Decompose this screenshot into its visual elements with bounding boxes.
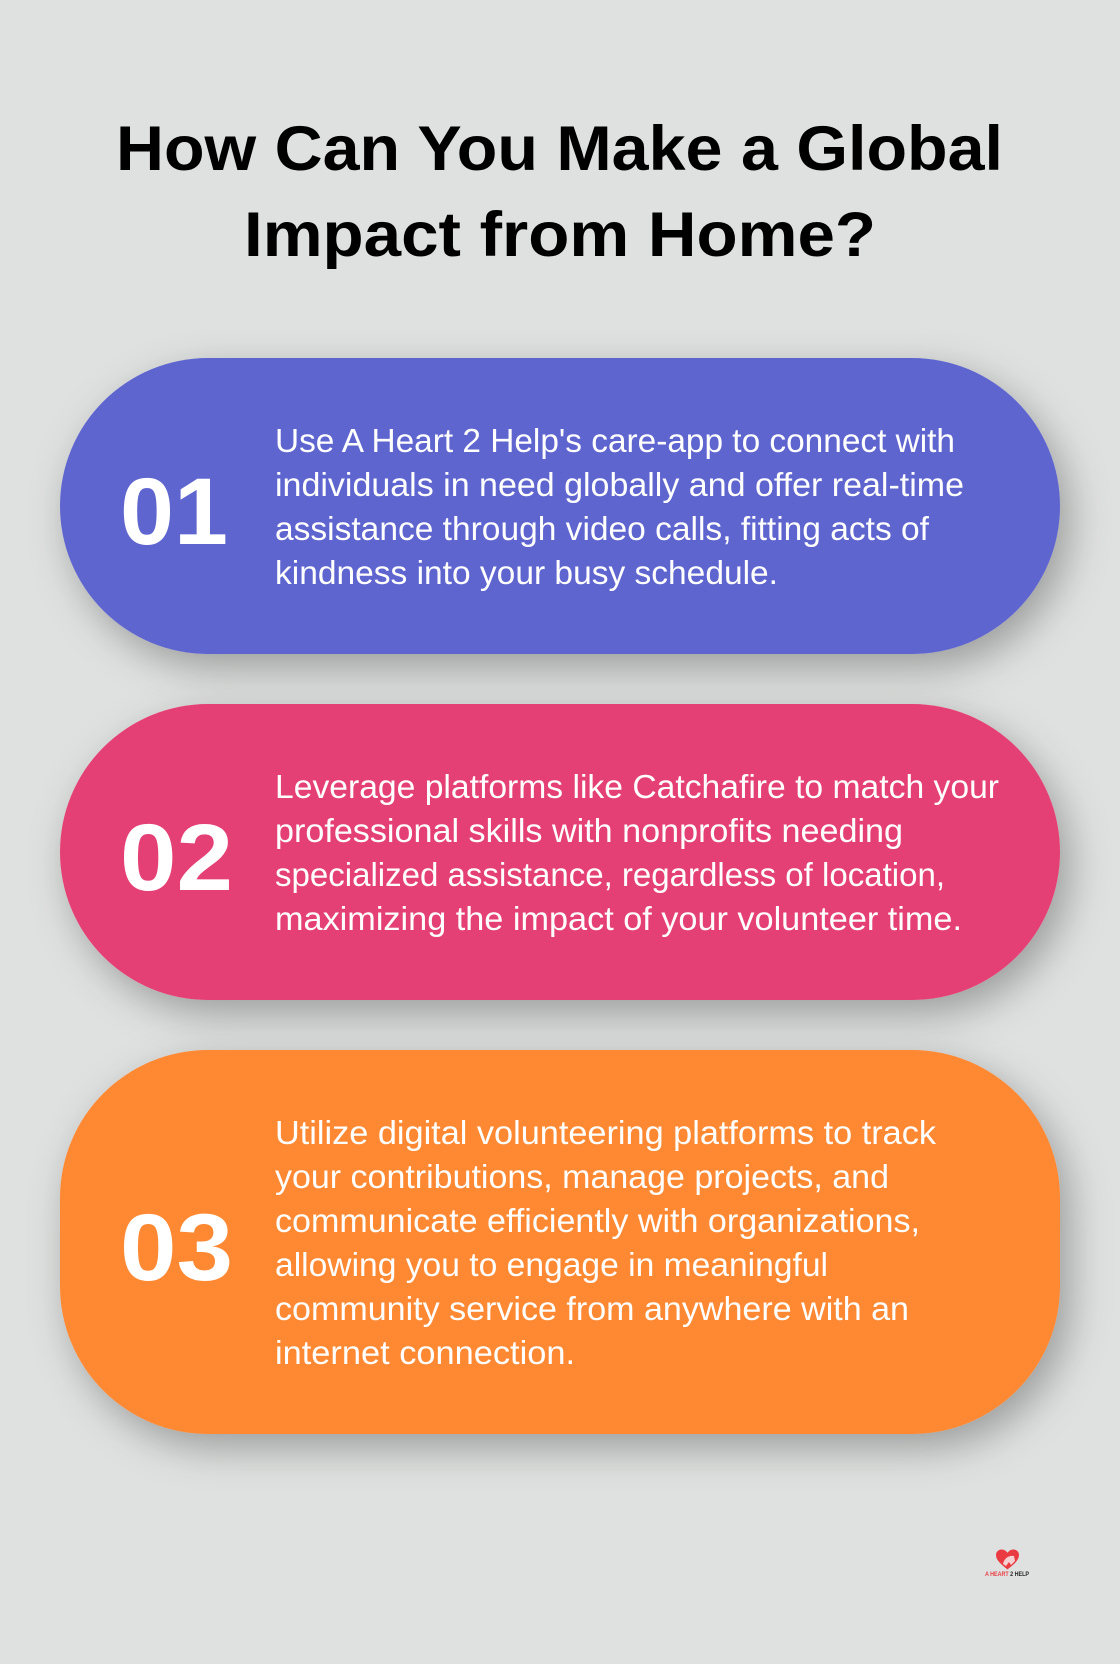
text block: step 02: Leverage platforms like Catchafire to match your: [275, 768, 999, 805]
text block: step 01: Use A Heart 2 Help's care-app to connect with: [275, 422, 955, 459]
title: [116, 114, 1003, 270]
text block: step 03: [275, 1114, 937, 1371]
logo: A Heart 2 Help: [985, 1550, 1030, 1578]
number: 03: 03: [120, 1195, 233, 1301]
text block: step 02: [275, 768, 999, 937]
text block: step 01: assistance through video calls, fitting acts of: [275, 510, 930, 547]
panel: step 02: [60, 704, 1060, 1000]
panel: step 01: [60, 358, 1060, 654]
text block: step 02: maximizing the impact of your volunteer time.: [275, 900, 962, 937]
text block: step 03: your contributions, manage projects, and: [275, 1158, 889, 1195]
title: How Can You Make a Global: [116, 114, 1003, 184]
text block: step 02: professional skills with nonprofits needing: [275, 812, 903, 849]
text block: step 01: [275, 422, 964, 591]
pill background: step 01: [60, 358, 1060, 654]
text block: step 03: allowing you to engage in meaningful: [275, 1246, 828, 1283]
panel: step 03: [60, 1050, 1060, 1434]
text block: step 01: individuals in need globally and offer real-time: [275, 466, 964, 503]
number: 01: 01: [120, 459, 228, 565]
text block: step 03: Utilize digital volunteering platforms to track: [275, 1114, 937, 1151]
text block: step 03: internet connection.: [275, 1334, 575, 1371]
title: Impact from Home?: [244, 200, 876, 270]
icon: heart: [996, 1550, 1019, 1570]
text block: step 01: kindness into your busy schedule.: [275, 554, 778, 591]
text block: step 03: communicate efficiently with organizations,: [275, 1202, 920, 1239]
text block: step 03: community service from anywhere with an: [275, 1290, 909, 1327]
number: 02: 02: [120, 805, 233, 911]
pill background: step 02: [60, 704, 1060, 1000]
logo wordmark: A HEART 2 HELP: [985, 1571, 1030, 1578]
text block: step 02: specialized assistance, regardless of location,: [275, 856, 945, 893]
pill background: step 03: [60, 1050, 1060, 1434]
icon: hands inside heart: [1003, 1556, 1015, 1566]
